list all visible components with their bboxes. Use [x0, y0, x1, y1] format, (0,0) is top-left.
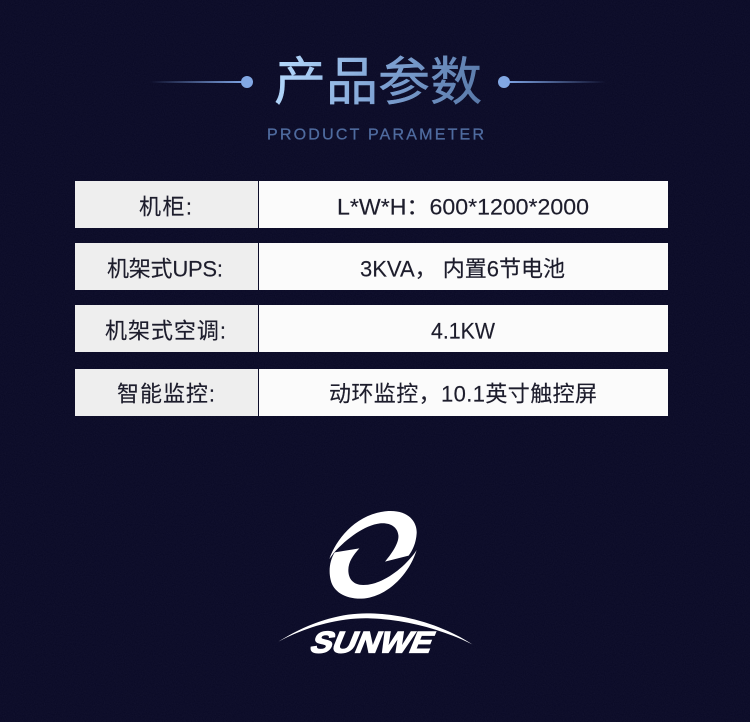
row: rack air conditioner: 4.1KW [431, 318, 495, 344]
subtitle: PRODUCT PARAMETER [267, 126, 484, 144]
row: rack UPS: 3KVA， 内置6节电池 [360, 256, 565, 282]
logo: SUNWE [278, 511, 472, 659]
row: smart monitoring [75, 369, 668, 416]
row: rack air conditioner [75, 305, 668, 352]
row: smart monitoring: 智能监控: [117, 382, 215, 406]
icon: arc above wordmark [278, 613, 472, 644]
header: title block [150, 40, 606, 144]
row: rack UPS: 机架式UPS: [107, 256, 223, 282]
decoration: right line and dot [498, 76, 606, 88]
row: cabinet [75, 181, 668, 228]
parameter table [75, 181, 668, 416]
row: smart monitoring: 动环监控，10.1英寸触控屏 [329, 382, 597, 406]
row: cabinet: 机柜: [139, 194, 192, 220]
row: rack air conditioner: 机架式空调: [105, 318, 226, 344]
row: rack UPS [75, 243, 668, 290]
row: cabinet: L*W*H：600*1200*2000 [337, 194, 589, 220]
decoration: left line and dot [150, 76, 253, 88]
wordmark: SUNWE [305, 626, 440, 659]
icon: swoosh emblem [329, 511, 417, 599]
title: 产品参数 [274, 40, 482, 115]
